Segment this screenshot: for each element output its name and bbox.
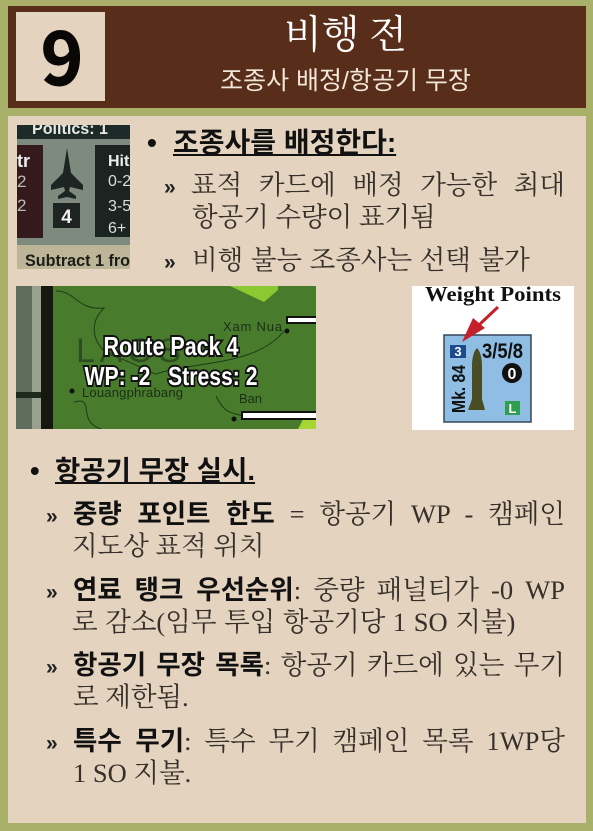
bullet text: special weapons: » (46, 732, 58, 755)
subtitle: 조종사 배정/항공기 무장 (220, 67, 471, 95)
image: weight points counter: 0 (508, 366, 517, 383)
image: aircraft card: 6+ (108, 220, 126, 237)
image: route pack map: Louangphrabang (82, 385, 183, 400)
image: weight points counter: 3/5/8 (482, 340, 523, 363)
bullet text: loadout list (46, 650, 565, 712)
bullet text: fuel tank priority: 로 감소(임무 투입 항공기당 1 SO 지불) (72, 607, 515, 637)
heading: aircraft loadout: 항공기 무장 실시. (55, 455, 255, 486)
bullet text: weight limit: 지도상 표적 위치 (72, 531, 264, 561)
bullet text: special weapons: 1 SO 지불. (73, 758, 191, 788)
heading: aircraft loadout: • (30, 455, 40, 486)
bullet text: pilot rule 1: 표적 카드에 배정 가능한 최대 (191, 170, 565, 200)
image: aircraft card: Hit (108, 153, 130, 170)
bullet text: pilot rule 2: 비행 불능 조종사는 선택 불가 (192, 245, 530, 275)
image: aircraft card: 4 (61, 207, 72, 228)
image: aircraft card: 2 (17, 196, 26, 215)
image: weight points counter: Mk. 84 (449, 365, 469, 413)
bullet text: loadout list: 항공기 무장 목록: 항공기 카드에 있는 무기 (73, 650, 565, 680)
image: route pack map (16, 286, 316, 429)
bullet text: weight limit: » (46, 505, 58, 528)
image: aircraft card (17, 125, 130, 269)
step number box: 9 (41, 1, 83, 106)
image: route pack map: LAOS (76, 332, 181, 370)
step number box (16, 12, 105, 101)
bullet text: special weapons: 특수 무기: 특수 무기 캠페인 목록 1WP당 (73, 726, 565, 756)
bullet text: fuel tank priority: 연료 탱크 우선순위: 중량 패널티가 -0 WP (73, 575, 565, 605)
image: aircraft card: tr (17, 151, 30, 171)
bullet text: pilot rule 2: » (164, 251, 176, 274)
image: route pack map: Route Pack 4 (104, 331, 239, 361)
image: route pack map: Xam Nua (223, 319, 283, 334)
heading: assign pilots: 조종사를 배정한다: (173, 127, 396, 158)
bullet text: fuel tank priority (46, 575, 565, 637)
bullet text: fuel tank priority: » (46, 581, 58, 604)
heading: assign pilots: • (147, 127, 157, 158)
title: 비행 전 (284, 14, 407, 57)
header band (8, 6, 586, 108)
image: weight points counter: L (509, 401, 517, 416)
bullet text: pilot rule 1: 항공기 수량이 표기됨 (192, 202, 436, 232)
image: weight points counter (412, 286, 574, 430)
bullet text: special weapons (46, 726, 565, 788)
image: aircraft card: 2 (17, 172, 26, 191)
bullet text: weight limit: 중량 포인트 한도 = 항공기 WP - 캠페인 (73, 499, 565, 529)
image: route pack map: Ban (239, 391, 262, 406)
bullet text: pilot rule 1: » (164, 176, 176, 199)
image: weight points counter: 3 (454, 344, 462, 359)
image: route pack map: WP: -2 Stress: 2 (84, 361, 258, 391)
bullet text: weight limit (46, 499, 565, 561)
bullet text: pilot rule 1 (164, 170, 565, 232)
bullet text: loadout list: 로 제한됨. (73, 682, 189, 712)
bullet text: loadout list: » (46, 656, 58, 679)
